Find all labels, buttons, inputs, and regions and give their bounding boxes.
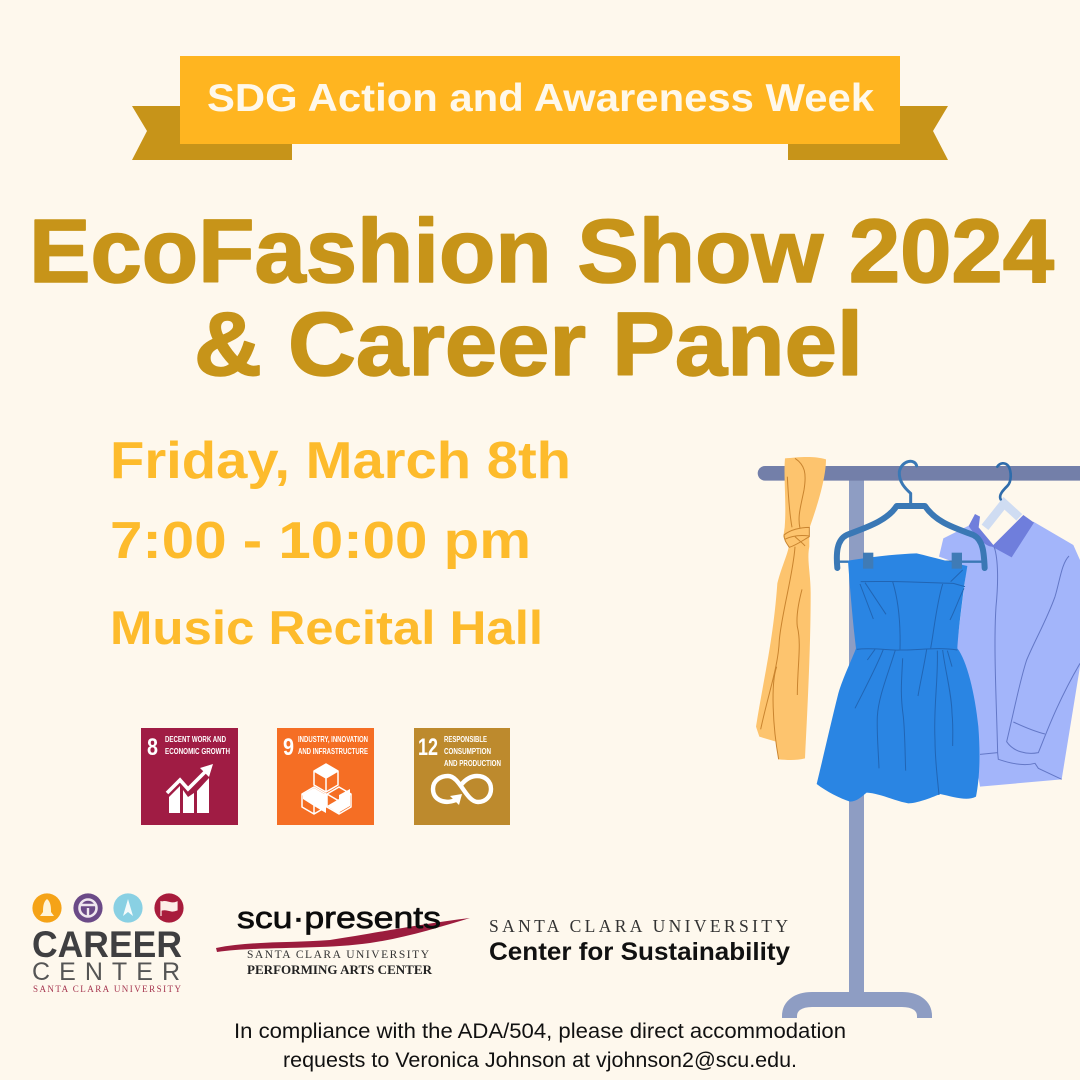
accessibility note bbox=[234, 1020, 846, 1072]
icon: SDG 8 decent work and economic growth: 8 bbox=[147, 734, 158, 761]
logo: career center: SANTA CLARA UNIVERSITY bbox=[33, 984, 182, 994]
icon: steering wheel badge bbox=[73, 893, 103, 923]
logo: scu presents: PERFORMING ARTS CENTER bbox=[247, 963, 433, 977]
logo: center for sustainability bbox=[489, 916, 790, 966]
event details: 7:00 - 10:00 pm bbox=[110, 512, 531, 570]
icon: SDG 9 industry, innovation and infrastructure: INDUSTRY, INNOVATION bbox=[298, 735, 368, 744]
icon: SDG 8 decent work and economic growth bbox=[141, 728, 238, 825]
icon: rocket badge bbox=[32, 893, 62, 923]
dress bbox=[817, 553, 980, 803]
icon: SDG 9 industry, innovation and infrastructure bbox=[277, 728, 374, 825]
illustration: clothes rack bbox=[756, 457, 1080, 1018]
logo: career center: CAREER bbox=[32, 924, 182, 965]
icon: SDG 12 responsible consumption and production: CONSUMPTION bbox=[444, 747, 491, 756]
logo: center for sustainability: Center for Sustainability bbox=[489, 938, 790, 966]
icon: flag badge bbox=[154, 893, 184, 923]
event details: Friday, March 8th bbox=[110, 432, 571, 490]
logo: scu presents bbox=[216, 900, 470, 977]
ribbon banner: SDG Action and Awareness Week bbox=[207, 77, 874, 120]
icon: SDG 8 decent work and economic growth: ECONOMIC GROWTH bbox=[165, 747, 230, 756]
event details bbox=[110, 432, 571, 654]
icon: SDG 12 responsible consumption and production bbox=[414, 728, 510, 825]
icon: SDG 12 responsible consumption and production: RESPONSIBLE bbox=[444, 735, 487, 744]
logo: career center: CENTER bbox=[32, 958, 180, 986]
title: EcoFashion Show 2024 bbox=[29, 202, 1054, 302]
accessibility note: requests to Veronica Johnson at vjohnson2@scu.edu. bbox=[283, 1049, 797, 1072]
logo: center for sustainability: SANTA CLARA UNIVERSITY bbox=[489, 916, 788, 936]
rack stand bbox=[758, 466, 1080, 1018]
dress hanger bbox=[837, 461, 985, 568]
icon: SDG 8 decent work and economic growth: DECENT WORK AND bbox=[165, 735, 226, 744]
logo: career center bbox=[32, 893, 184, 994]
event details: Music Recital Hall bbox=[110, 601, 543, 654]
logo: scu presents: scu·presents bbox=[237, 900, 441, 935]
ribbon banner bbox=[132, 56, 948, 160]
logo: scu presents: SANTA CLARA UNIVERSITY bbox=[247, 949, 430, 961]
icon: SDG 9 industry, innovation and infrastructure: 9 bbox=[283, 734, 294, 761]
scarf bbox=[756, 457, 826, 760]
icon: SDG 12 responsible consumption and production: AND PRODUCTION bbox=[444, 759, 501, 768]
icon: SDG 12 responsible consumption and production: 12 bbox=[418, 734, 438, 761]
icon: SDG 9 industry, innovation and infrastructure: AND INFRASTRUCTURE bbox=[298, 747, 368, 756]
icon: compass badge bbox=[113, 893, 143, 923]
title bbox=[29, 202, 1054, 395]
accessibility note: In compliance with the ADA/504, please direct accommodation bbox=[234, 1020, 846, 1043]
shirt bbox=[939, 463, 1080, 787]
title: & Career Panel bbox=[194, 295, 863, 395]
